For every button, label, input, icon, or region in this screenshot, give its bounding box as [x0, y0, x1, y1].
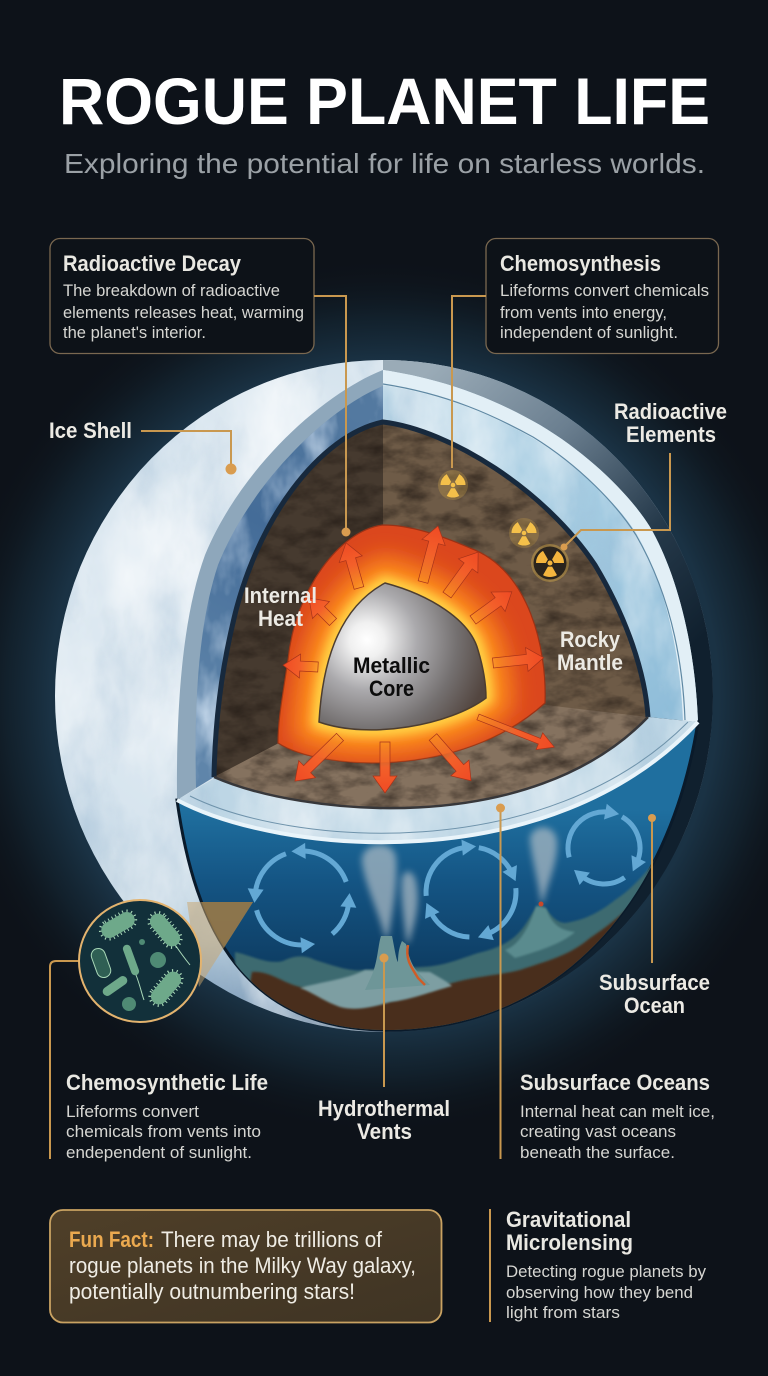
heat arrows: [282, 523, 558, 793]
mantle floor edge: [214, 717, 648, 808]
text block: Gravitational Microlensing: observing how they bend: [506, 1283, 693, 1302]
label: Subsurface Ocean: Subsurface: [599, 970, 710, 995]
label: Hydrothermal Vents: Vents: [357, 1119, 412, 1144]
right cut face of ice shell: [383, 370, 698, 722]
callout: Chemosynthesis: Chemosynthesis: [500, 251, 661, 276]
callout: Radioactive Decay: the planet's interior.: [63, 323, 206, 342]
subtitle: Exploring the potential for life on starless worlds.: [64, 148, 705, 179]
planet ice surface: [55, 360, 713, 1032]
label: Rocky Mantle: Rocky: [560, 627, 621, 652]
callout: Chemosynthesis: from vents into energy,: [500, 303, 667, 322]
fun fact box: There may be trillions of: [161, 1227, 383, 1252]
text block: Subsurface Oceans: [520, 1070, 715, 1162]
label: Radioactive Elements: Radioactive: [614, 399, 727, 424]
text block: Gravitational Microlensing: [506, 1207, 706, 1322]
fun fact box: Fun Fact:: [69, 1227, 154, 1252]
text block: Chemosynthetic Life: Chemosynthetic Life: [66, 1070, 268, 1095]
label: Subsurface Ocean: Ocean: [624, 993, 685, 1018]
ice floor bright rim: [177, 722, 698, 842]
fun fact box: rogue planets in the Milky Way galaxy,: [69, 1253, 416, 1278]
callout: Chemosynthesis: Lifeforms convert chemicals: [500, 281, 709, 300]
mantle outer rim: [214, 422, 648, 777]
far side shell in shadow: [383, 350, 723, 1050]
text block: Subsurface Oceans: creating vast oceans: [520, 1122, 676, 1141]
text block: Chemosynthetic Life: [66, 1070, 268, 1162]
text block: Gravitational Microlensing: Gravitational: [506, 1207, 631, 1232]
label: Radioactive Elements: Elements: [626, 422, 716, 447]
hydrothermal vents: [362, 828, 557, 990]
internal heat layer: [278, 525, 545, 763]
leader: Subsurface Ocean: [648, 814, 656, 963]
current arrows ring 2: [419, 838, 523, 945]
callout: Radioactive Decay: elements releases heat, warming: [63, 303, 304, 322]
leader: Radioactive Elements: [560, 453, 670, 550]
leader: Chemosynthesis to element: [452, 296, 486, 468]
leader: Radioactive Decay to heat: [314, 296, 350, 536]
text block: Subsurface Oceans: Internal heat can melt ice,: [520, 1102, 715, 1121]
text block: Chemosynthetic Life: Lifeforms convert: [66, 1102, 199, 1121]
fun fact box: [50, 1210, 442, 1322]
label: Radioactive Elements: [614, 399, 727, 447]
mantle right face: [383, 422, 648, 717]
left cut face of ice shell: [177, 370, 383, 800]
callout: Radioactive Decay: Radioactive Decay: [63, 251, 242, 276]
microbe inset: [79, 900, 201, 1022]
ice floor contour line: [190, 722, 688, 833]
text block: Gravitational Microlensing: Microlensing: [506, 1230, 633, 1255]
label: Rocky Mantle: Mantle: [557, 650, 623, 675]
callout: Chemosynthesis: [486, 238, 718, 354]
leader: Chemosynthetic Life: [50, 961, 80, 1159]
current arrows ring 1: [246, 843, 358, 953]
label: Hydrothermal Vents: Hydrothermal: [318, 1096, 450, 1121]
label: Rocky Mantle: [557, 627, 623, 675]
planet cutaway diagram: [55, 350, 723, 1050]
subsurface ocean: [177, 722, 700, 1040]
leader: Hydrothermal Vents: [380, 954, 388, 1087]
radioactive icon small top: [438, 470, 468, 500]
label: Metallic Core: Metallic: [353, 653, 430, 678]
seafloor terrain: [234, 860, 655, 1030]
callout: Chemosynthesis: independent of sunlight.: [500, 323, 678, 342]
text block: Chemosynthetic Life: endependent of sunlight.: [66, 1143, 252, 1162]
ice shell floor: [177, 717, 698, 842]
radioactive icon small middle: [509, 518, 539, 548]
callout: Radioactive Decay: The breakdown of radioactive: [63, 281, 280, 300]
radioactive icon large: [531, 544, 569, 582]
mantle floor: [214, 698, 648, 808]
divider: Gravitational Microlensing: [489, 1209, 491, 1322]
leader: Ice Shell: [141, 431, 236, 474]
leader: Subsurface Oceans: [496, 804, 505, 1159]
label: Metallic Core: [353, 653, 430, 701]
text block: Subsurface Oceans: beneath the surface.: [520, 1143, 675, 1162]
zoom cone to microbe inset: [187, 902, 253, 987]
label: Metallic Core: Core: [369, 676, 414, 701]
metallic core: [319, 583, 486, 730]
text block: Subsurface Oceans: Subsurface Oceans: [520, 1070, 710, 1095]
mantle left face: [214, 422, 383, 777]
text block: Gravitational Microlensing: Detecting rogue planets by: [506, 1262, 706, 1281]
label: Subsurface Ocean: [599, 970, 710, 1018]
current arrows ring 3: [568, 804, 646, 885]
title: ROGUE PLANET LIFE: [59, 64, 710, 138]
text block: Chemosynthetic Life: chemicals from vents into: [66, 1122, 261, 1141]
label: Internal Heat: [244, 583, 317, 631]
label: Ice Shell: Ice Shell: [49, 418, 132, 443]
callout: Radioactive Decay: [50, 238, 314, 354]
fun fact box: potentially outnumbering stars!: [69, 1279, 355, 1304]
background glow around the planet: [0, 256, 768, 1136]
label: Internal Heat: Internal: [244, 583, 317, 608]
label: Internal Heat: Heat: [258, 606, 304, 631]
text block: Gravitational Microlensing: light from stars: [506, 1303, 620, 1322]
label: Hydrothermal Vents: [318, 1096, 450, 1144]
